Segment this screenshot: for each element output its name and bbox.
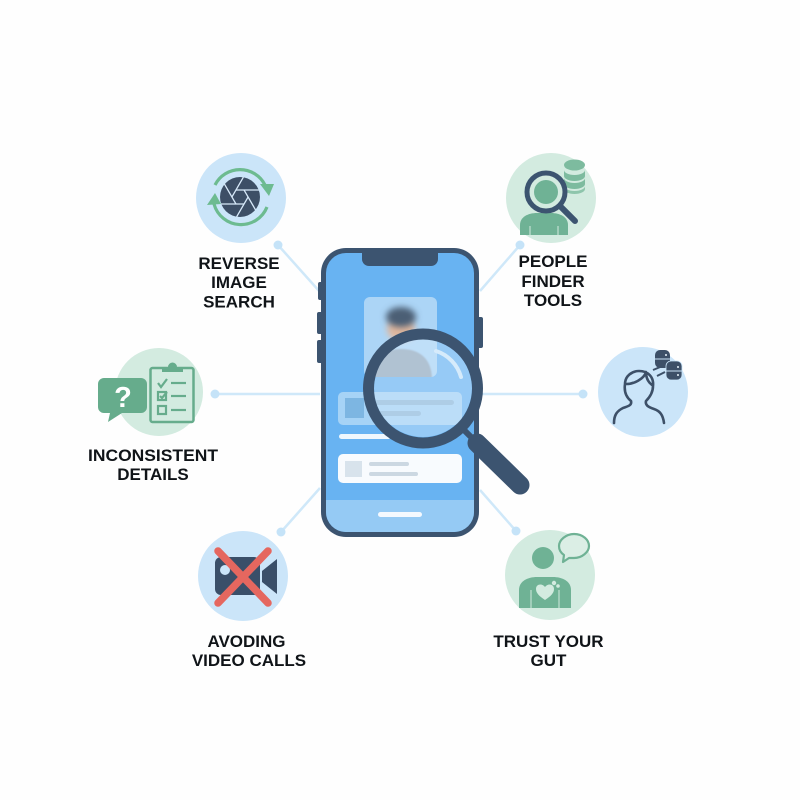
label: FINDER [521, 272, 585, 291]
item: inconsistent details [88, 348, 219, 484]
circle [196, 153, 286, 243]
icon: question bubble: ? [114, 382, 132, 414]
icon: red cross [218, 551, 268, 603]
icon: head outline [614, 371, 664, 423]
label [192, 632, 306, 670]
magnifying glass [368, 334, 520, 485]
icon: linked databases [653, 350, 682, 380]
connector lines [210, 240, 588, 536]
label: REVERSE [198, 254, 280, 273]
home bar [378, 512, 422, 517]
label: TOOLS [524, 291, 582, 310]
item: trust your gut [493, 530, 604, 670]
icon: person under magnifier with database [520, 160, 585, 235]
white bar [339, 434, 391, 439]
label: VIDEO CALLS [192, 651, 306, 670]
label: DETAILS [117, 465, 189, 484]
label: IMAGE [211, 273, 267, 292]
item: people finder tools [506, 153, 596, 310]
lens ring [368, 334, 478, 443]
info card one [338, 392, 462, 425]
notch [362, 251, 438, 266]
item: reverse image search [196, 153, 286, 312]
icon: video camera [215, 557, 277, 595]
phone body [321, 248, 479, 537]
phone with magnifying glass [317, 248, 520, 537]
circle [115, 348, 203, 436]
info card two [338, 454, 462, 483]
phone screen [326, 253, 474, 532]
lens glass [374, 339, 472, 437]
phone side buttons [317, 282, 483, 363]
label: AVODING [207, 632, 286, 651]
handle [477, 443, 520, 485]
label [493, 632, 604, 670]
label: SEARCH [203, 292, 275, 312]
label [198, 254, 280, 312]
blurred profile photo [364, 297, 437, 380]
label: PEOPLE [519, 252, 587, 271]
circle [198, 531, 288, 621]
circle [506, 153, 596, 243]
circle [505, 530, 595, 620]
icon: speech bubble [559, 534, 589, 562]
label [88, 446, 219, 484]
circle [598, 347, 688, 437]
icon: camera aperture with arrows [207, 170, 274, 225]
label: INCONSISTENT [88, 446, 219, 465]
item: avoiding video calls [192, 531, 306, 670]
label: TRUST YOUR [493, 632, 604, 651]
icon: clipboard checklist [150, 362, 194, 422]
lens highlight [436, 351, 461, 377]
item: head with databases [598, 347, 688, 437]
label: GUT [531, 651, 567, 670]
icon: person with heart [519, 547, 571, 608]
label [519, 252, 587, 310]
